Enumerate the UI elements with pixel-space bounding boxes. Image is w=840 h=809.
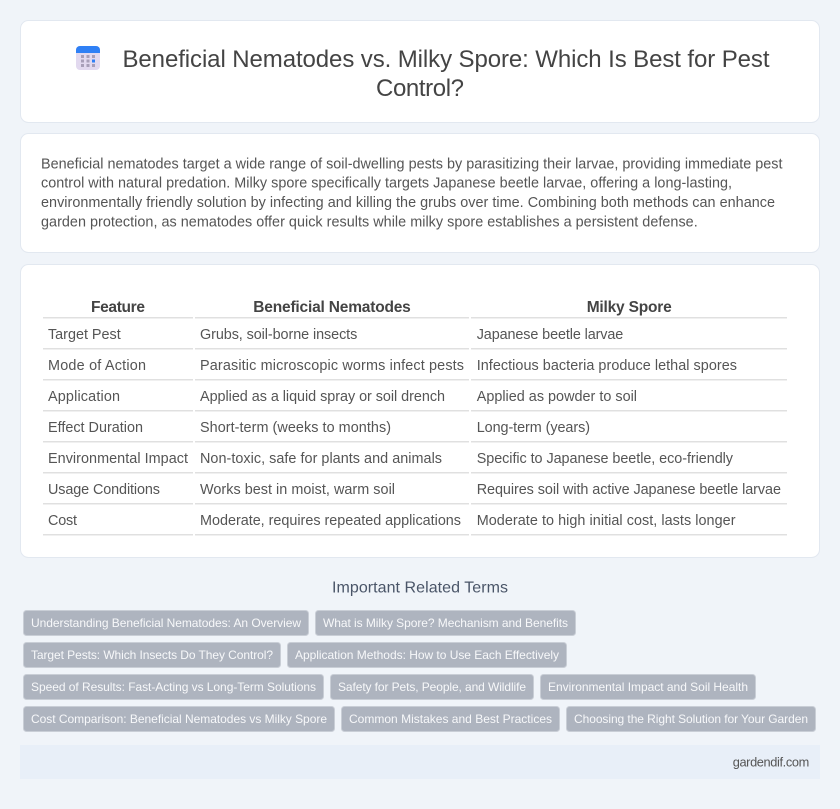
row: cost: Cost — [48, 513, 77, 529]
tag — [24, 642, 280, 668]
tag — [342, 706, 560, 732]
panel: comparison table — [20, 264, 820, 558]
tag: Environmental Impact and Soil Health — [548, 680, 748, 694]
footer — [20, 745, 820, 779]
text block: summary: Beneficial nematodes target a wide range of soil-dwelling pests by parasitizing their larvae, providing immediate pest — [41, 156, 782, 172]
row: environmental impact: Environmental Impact — [48, 451, 188, 467]
tag: Safety for Pets, People, and Wildlife — [338, 680, 526, 694]
row: target pest: Grubs, soil-borne insects — [200, 327, 357, 343]
panel: title header — [20, 20, 820, 122]
icon: calendar — [76, 46, 100, 70]
tag: What is Milky Spore? Mechanism and Benefits — [323, 616, 568, 630]
tag: Common Mistakes and Best Practices — [349, 712, 552, 726]
text block: summary: control with natural predation. Milky spore specifically targets Japanese beetle larvae, offering a long-lasting, — [41, 176, 732, 192]
row: target pest: Japanese beetle larvae — [477, 327, 623, 343]
text block: summary: garden protection, as nematodes offer quick results while milky spore establishes a persistent defense. — [41, 215, 698, 231]
table header row: Feature — [91, 299, 145, 316]
row: environmental impact: Non-toxic, safe for plants and animals — [200, 451, 442, 467]
footer: gardendif.com — [733, 754, 809, 770]
tag — [316, 610, 576, 636]
row: usage conditions: Requires soil with active Japanese beetle larvae — [477, 482, 781, 498]
row: mode of action: Infectious bacteria produce lethal spores — [477, 358, 737, 374]
tag — [330, 674, 534, 700]
table header row: Milky Spore — [587, 299, 672, 316]
tag: Cost Comparison: Beneficial Nematodes vs Milky Spore — [31, 712, 327, 726]
row: mode of action: Parasitic microscopic worms infect pests — [200, 358, 464, 374]
row: mode of action — [48, 358, 737, 374]
row: effect duration — [48, 420, 590, 436]
table grid lines — [43, 317, 787, 536]
tag — [24, 674, 324, 700]
tag: Speed of Results: Fast-Acting vs Long-Term Solutions — [31, 680, 316, 694]
tag list: related terms — [24, 610, 816, 732]
row: effect duration: Long-term (years) — [477, 420, 590, 436]
tag: Application Methods: How to Use Each Effectively — [295, 648, 559, 662]
panel: summary paragraph — [20, 134, 820, 252]
row: application: Application — [48, 389, 120, 405]
tag — [566, 706, 816, 732]
row: mode of action: Mode of Action — [48, 358, 146, 374]
row: target pest: Target Pest — [48, 327, 121, 343]
table header row — [91, 299, 672, 316]
row: application: Applied as a liquid spray or soil drench — [200, 389, 445, 405]
tag — [24, 610, 308, 636]
heading: important related terms: Important Related Terms — [332, 580, 508, 596]
text block: summary: environmentally friendly solution by infecting and killing the grubs over time. Combining both methods can enhance — [41, 195, 775, 211]
row: usage conditions: Works best in moist, warm soil — [200, 482, 395, 498]
row: environmental impact — [48, 451, 734, 467]
tag — [288, 642, 566, 668]
row: usage conditions: Usage Conditions — [48, 482, 160, 498]
table header row: Beneficial Nematodes — [253, 299, 411, 316]
title: Control? — [376, 75, 464, 102]
row: cost: Moderate, requires repeated applications — [200, 513, 461, 529]
title — [122, 46, 770, 102]
row: cost — [48, 513, 736, 529]
tag: Choosing the Right Solution for Your Garden — [574, 712, 808, 726]
row: environmental impact: Specific to Japanese beetle, eco-friendly — [477, 451, 734, 467]
tag: Target Pests: Which Insects Do They Control? — [31, 648, 273, 662]
row: effect duration: Effect Duration — [48, 420, 143, 436]
row: usage conditions — [48, 482, 781, 498]
title: Beneficial Nematodes vs. Milky Spore: Which Is Best for Pest — [122, 46, 770, 73]
row: target pest — [48, 327, 623, 343]
tag — [540, 674, 756, 700]
tag — [24, 706, 334, 732]
tag: Understanding Beneficial Nematodes: An Overview — [31, 616, 301, 630]
row: cost: Moderate to high initial cost, lasts longer — [477, 513, 736, 529]
text block: summary — [41, 156, 782, 231]
row: effect duration: Short-term (weeks to months) — [200, 420, 391, 436]
row: application — [48, 389, 637, 405]
row: application: Applied as powder to soil — [477, 389, 637, 405]
